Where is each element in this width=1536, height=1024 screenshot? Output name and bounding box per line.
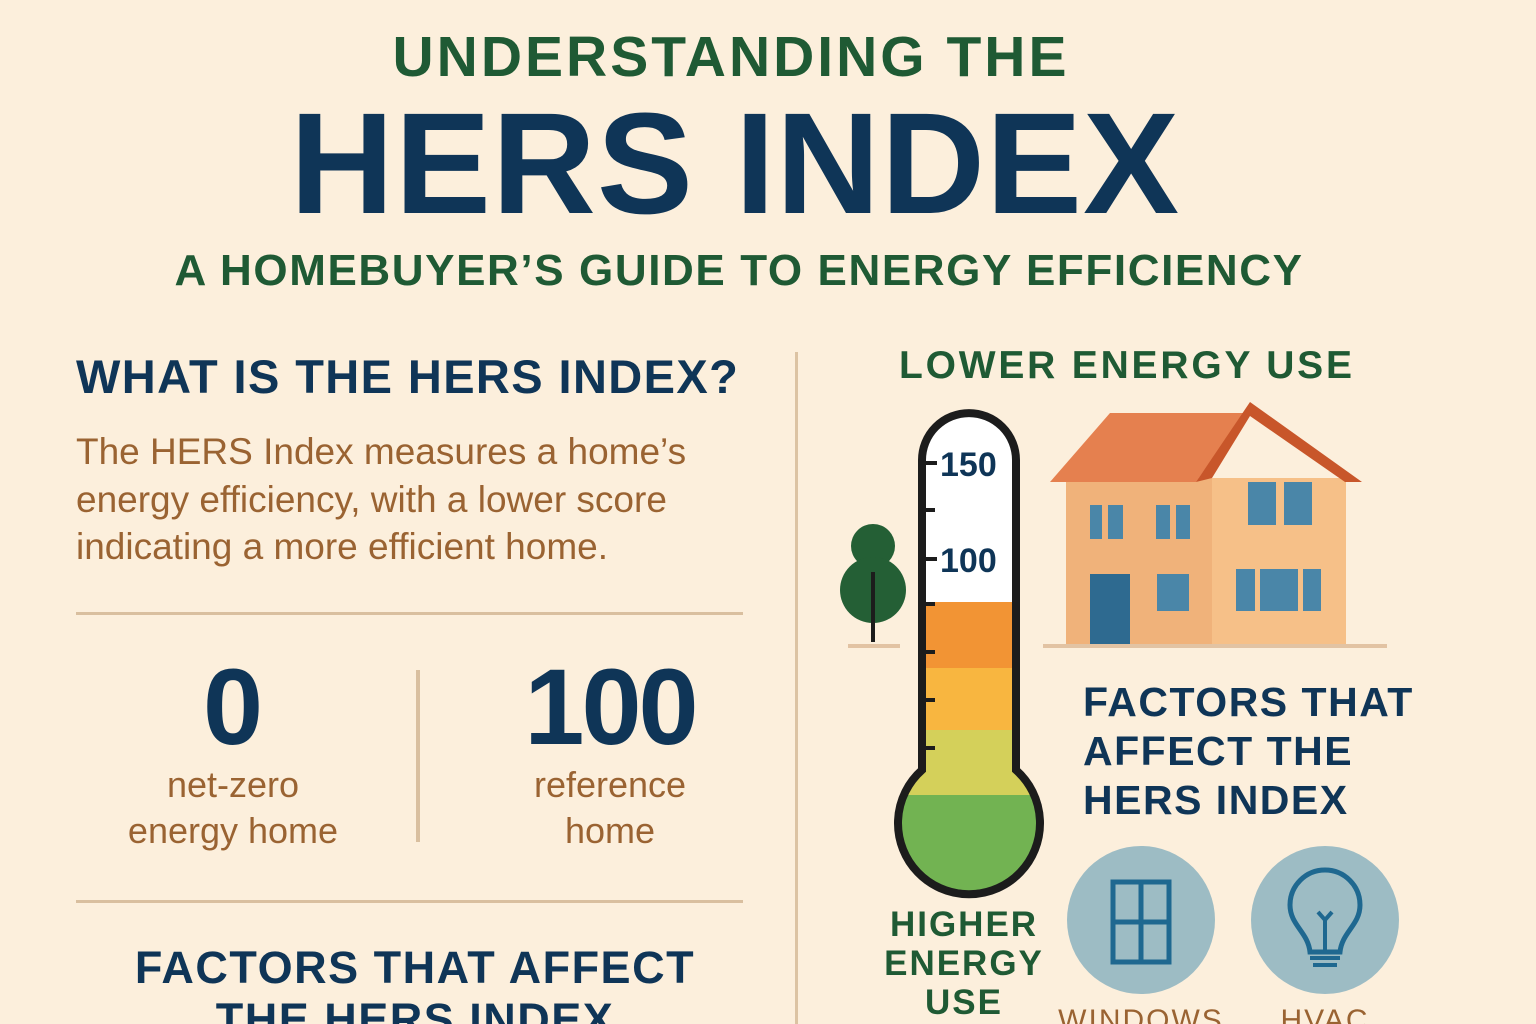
graphics	[840, 402, 1399, 994]
subtitle: A HOMEBUYER’S GUIDE TO ENERGY EFFICIENCY	[174, 246, 1304, 295]
label: higher energy use	[884, 905, 1044, 1022]
heading: what is the HERS index: WHAT IS THE HERS INDEX?	[76, 350, 739, 403]
heading: factors (right): AFFECT THE	[1083, 728, 1353, 774]
stat: 100 reference: 100	[524, 646, 696, 767]
title: understanding the: UNDERSTANDING THE	[393, 25, 1069, 89]
icon: thermometer	[894, 409, 1044, 898]
icon: thermometer: 150	[940, 446, 997, 484]
heading: factors (right): HERS INDEX	[1083, 777, 1349, 823]
heading: lower energy use: LOWER ENERGY USE	[899, 344, 1355, 387]
heading: factors (left)	[135, 942, 695, 1024]
label: higher energy use: HIGHER	[890, 905, 1038, 944]
icon: HVAC bulb circle	[1251, 846, 1399, 994]
label: higher energy use: ENERGY	[884, 944, 1044, 983]
icon: windows circle	[1067, 846, 1215, 994]
stat: 100 reference: home	[565, 810, 655, 851]
heading: factors (right): FACTORS THAT	[1083, 679, 1414, 725]
heading: factors (left): FACTORS THAT AFFECT	[135, 942, 695, 993]
icon: thermometer: 100	[940, 542, 997, 580]
stat: 0 net-zero: net-zero	[167, 764, 299, 805]
stat: 0 net-zero	[128, 646, 338, 851]
stat: 100 reference: reference	[534, 764, 686, 805]
label: higher energy use: USE	[925, 983, 1003, 1022]
stat: 0 net-zero: 0	[203, 646, 263, 767]
icon: tree	[840, 524, 906, 646]
heading: factors (right)	[1083, 679, 1414, 823]
stat: 100 reference	[524, 646, 696, 851]
icon: house	[1043, 402, 1387, 646]
stat: 0 net-zero: energy home	[128, 810, 338, 851]
text block: definition: The HERS Index measures a home’s energy efficiency, with a lower score indicating a more efficient home.	[76, 431, 686, 567]
title: HERS INDEX: HERS INDEX	[290, 83, 1180, 244]
